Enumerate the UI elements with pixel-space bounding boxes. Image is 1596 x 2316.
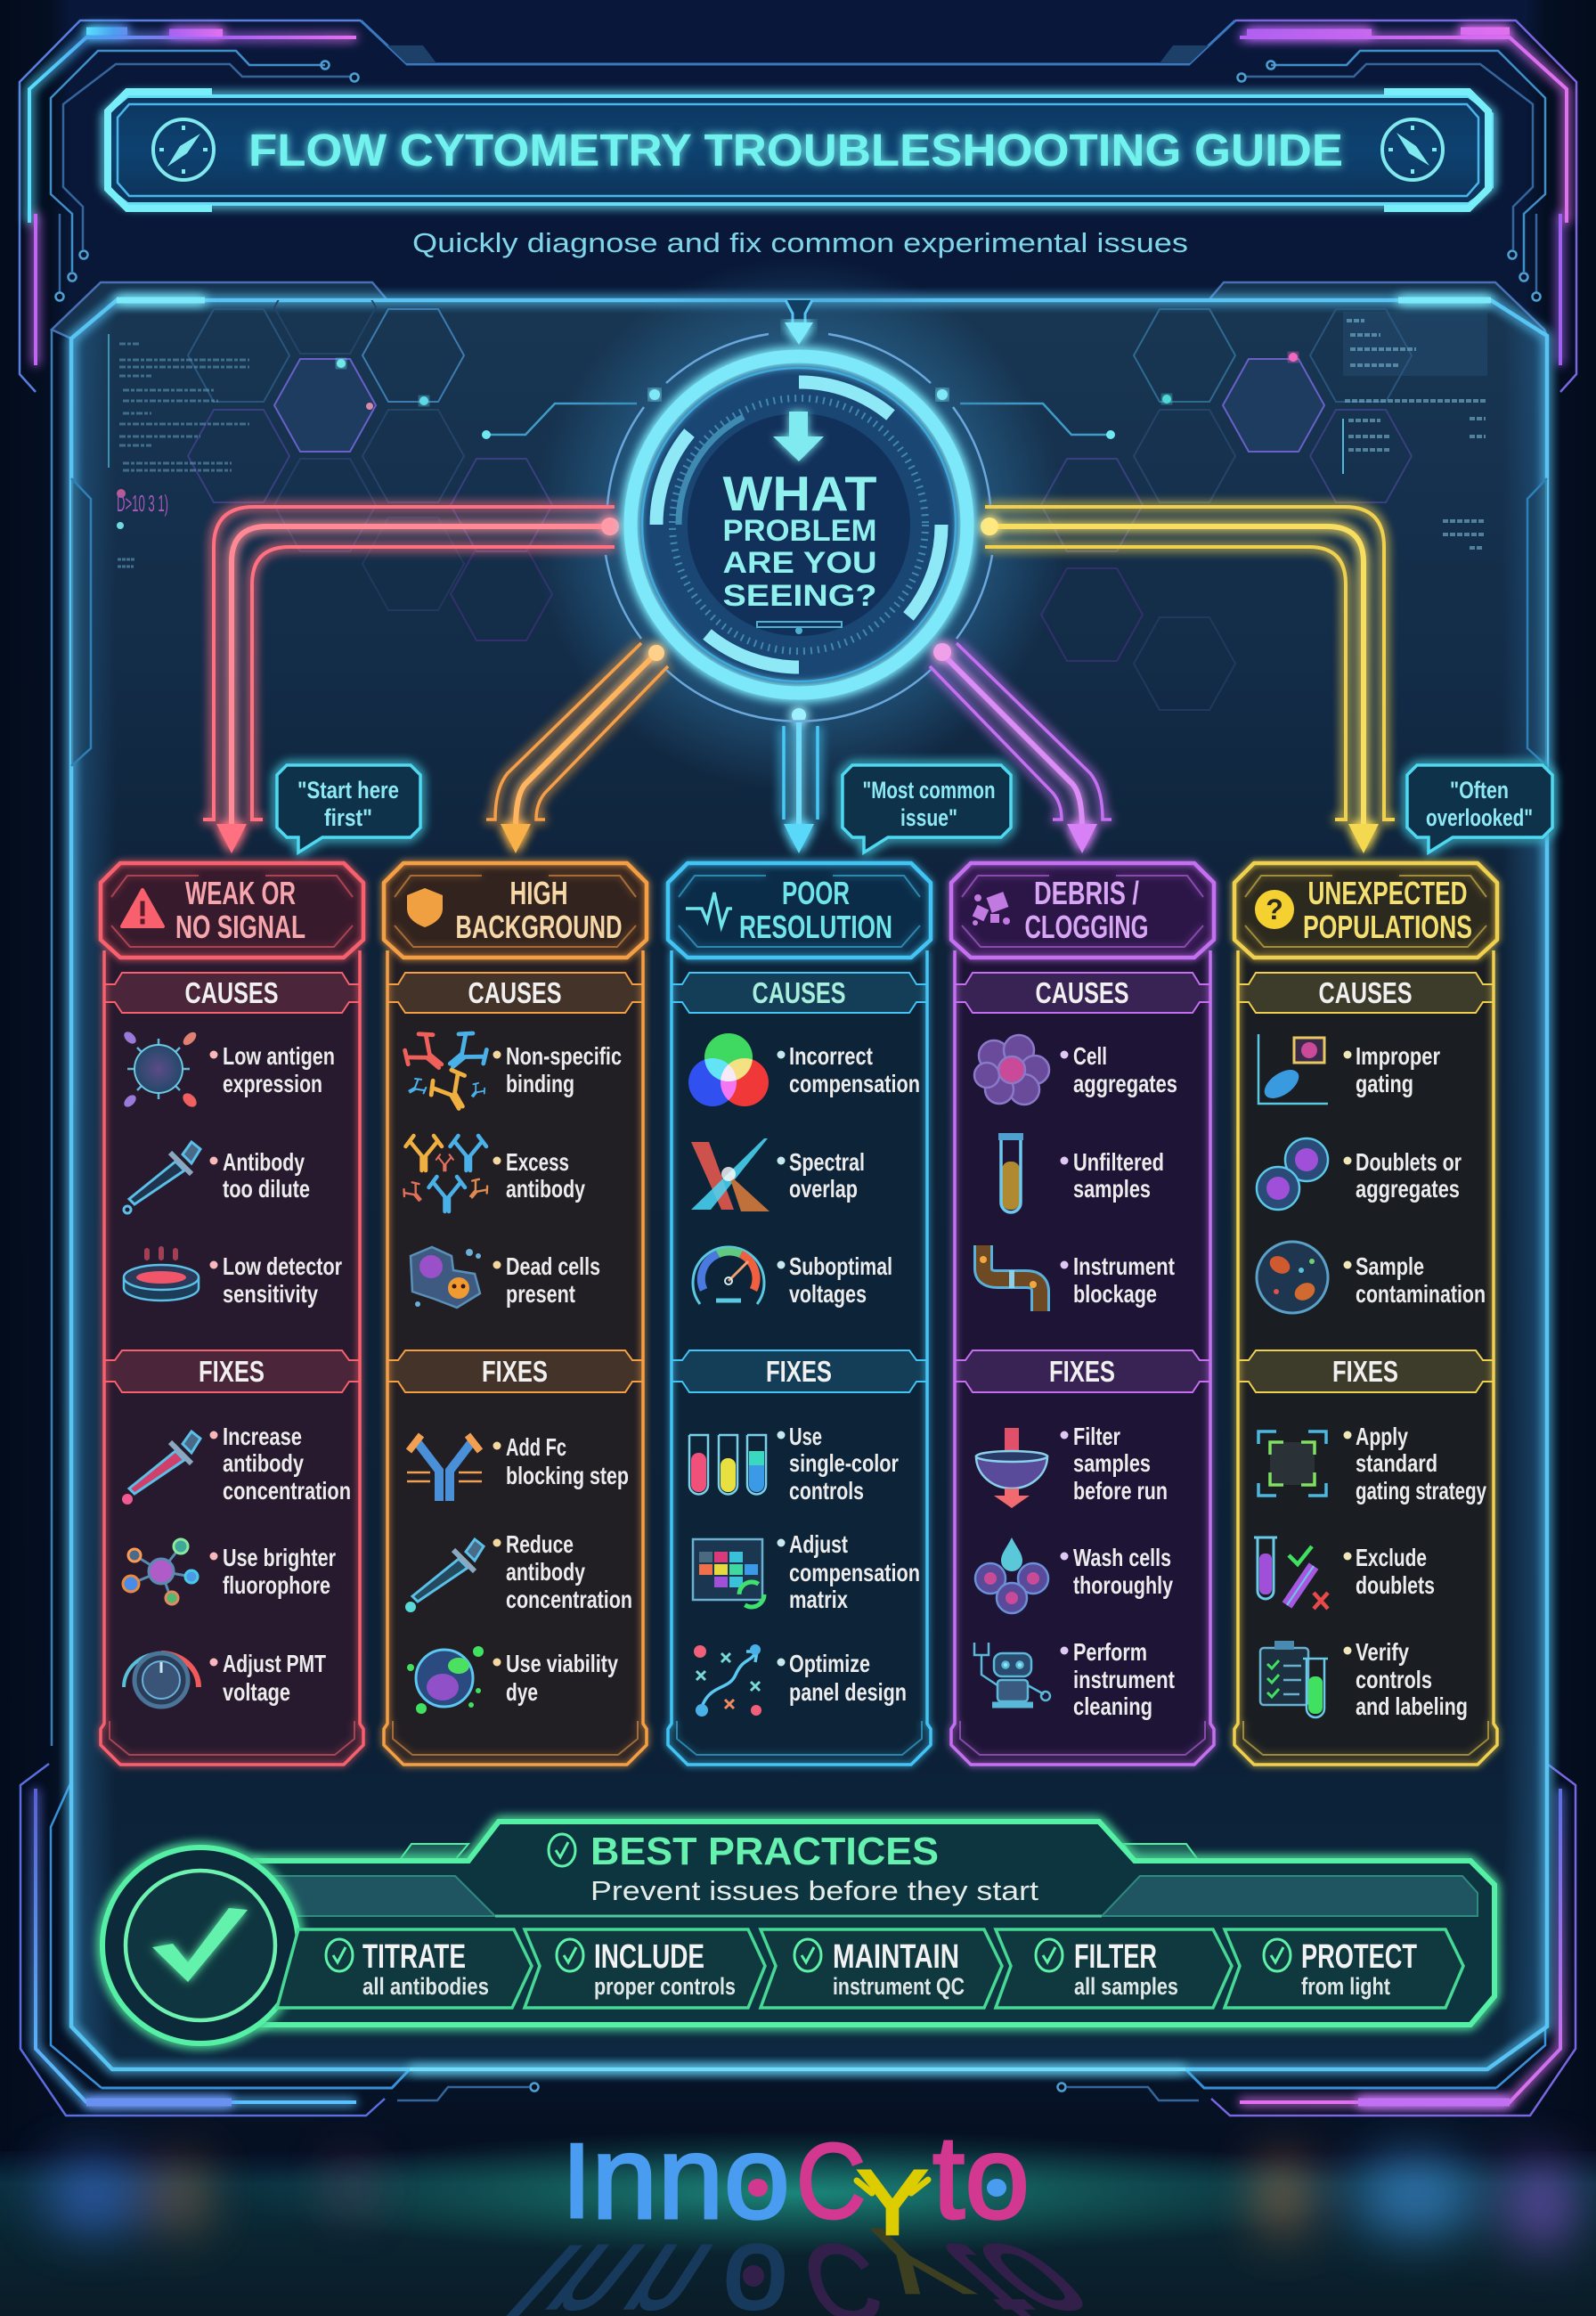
logo: InnoCyto: Y: [857, 2151, 928, 2254]
chevron: titrate: [277, 1929, 532, 2008]
fix: wash cells thoroughly: Wash cells: [1073, 1544, 1171, 1571]
fix: perform instrument cleaning: instrument: [1073, 1666, 1175, 1693]
cause: antibody too dilute: too dilute: [223, 1175, 310, 1203]
cause: antibody too dilute: [124, 1142, 310, 1213]
heading: debris clogging: DEBRIS /: [1034, 875, 1139, 911]
callout: often overlooked: overlooked": [1426, 804, 1533, 831]
label: fixes: FIXES: [199, 1355, 265, 1388]
main panel: [52, 282, 1547, 2073]
icon: voltage dial: [124, 1653, 199, 1707]
chevron: protect: from light: [1301, 1973, 1390, 2000]
arrow: weak or no signal: [203, 507, 619, 853]
arrow: high background: [486, 643, 668, 853]
fix: wash cells thoroughly: [975, 1537, 1173, 1613]
cause: unfiltered samples: samples: [1073, 1175, 1151, 1203]
cause: low detector sensitivity: [124, 1249, 342, 1308]
callout: most common issue: "Most common: [862, 777, 996, 803]
frame bottom connector: [102, 2069, 1496, 2088]
callout: start here first: first": [324, 804, 372, 831]
panel: weak or no signal: [101, 863, 363, 1765]
heading: unexpected populations: POPULATIONS: [1303, 909, 1472, 945]
cause: antibody too dilute: Antibody: [223, 1148, 305, 1176]
heading: high background: BACKGROUND: [456, 909, 622, 945]
label: causes: CAUSES: [752, 976, 846, 1009]
bracket top left: [20, 20, 361, 392]
title text: FLOW CYTOMETRY TROUBLESHOOTING GUIDE: [248, 125, 1343, 175]
callout: often overlooked: "Often: [1450, 777, 1509, 803]
fix: exclude doublets: [1254, 1537, 1435, 1609]
chevron: titrate: all antibodies: [362, 1973, 489, 2000]
chevron: maintain: MAINTAIN: [833, 1938, 959, 1976]
panel: debris clogging: [951, 863, 1214, 1765]
cause: improper gating: Improper: [1356, 1042, 1440, 1070]
cause: non-specific binding: [399, 1027, 622, 1117]
icon: compass left: [153, 119, 214, 180]
icon: cell with antigens: [122, 1030, 200, 1110]
heading: poor resolution: POOR: [782, 875, 850, 911]
frame top connector: [361, 20, 1235, 64]
icon: petri dish: [124, 1249, 199, 1301]
heading: poor resolution: [686, 875, 892, 945]
cause: incorrect compensation: Incorrect: [789, 1042, 873, 1070]
chevron: filter: FILTER: [1074, 1938, 1157, 1976]
fix: optimize panel design: Optimize: [789, 1650, 870, 1677]
icon: three tubes: [689, 1435, 766, 1495]
cause: cell aggregates: aggregates: [1073, 1070, 1177, 1097]
sub band left: [272, 1876, 495, 1916]
heading: debris clogging: CLOGGING: [1024, 909, 1149, 945]
central hub: [606, 334, 992, 722]
fix: reduce antibody concentration: Reduce: [506, 1530, 574, 1558]
icon: dropper: [124, 1142, 200, 1213]
icon: strategy plot: [694, 1644, 761, 1717]
icon: question badge: ?: [1266, 893, 1283, 926]
label: causes: CAUSES: [1318, 976, 1413, 1009]
fix: apply standard gating strategy: [1258, 1423, 1486, 1505]
callout: most common issue: issue": [900, 804, 957, 831]
label: fixes: FIXES: [1049, 1355, 1115, 1388]
fix: increase antibody concentration: concentration: [223, 1477, 351, 1505]
heading: poor resolution: RESOLUTION: [739, 909, 892, 945]
panel: high background: [384, 863, 647, 1765]
fix: wash cells thoroughly: thoroughly: [1073, 1571, 1173, 1599]
fix: use single-color controls: single-color: [789, 1449, 899, 1477]
icon: warning: [122, 890, 163, 926]
chevron: protect: [1225, 1929, 1463, 2008]
cause: instrument blockage: [980, 1245, 1175, 1311]
fix: use single-color controls: controls: [789, 1477, 864, 1505]
fix: increase antibody concentration: Increase: [223, 1423, 302, 1450]
fix: add fc blocking step: blocking step: [506, 1462, 629, 1489]
logo: InnoCyto: to: [932, 2112, 1030, 2244]
hub glow: [532, 257, 1066, 792]
heading: weak or no signal: WEAK OR: [185, 875, 296, 911]
cause: low detector sensitivity: sensitivity: [223, 1280, 318, 1308]
heading: weak or no signal: NO SIGNAL: [175, 909, 305, 945]
floor reflection: [0, 2131, 1596, 2316]
icon: big check badge: [102, 1847, 298, 2043]
callout: most common issue: [843, 765, 1011, 852]
label: fixes: FIXES: [766, 1355, 832, 1388]
fix: perform instrument cleaning: cleaning: [1073, 1692, 1152, 1720]
icon: many antibodies: [401, 1136, 491, 1211]
label: causes: CAUSES: [468, 976, 561, 1009]
icon: debris particles: [973, 892, 1010, 926]
cause: doublets or aggregates: aggregates: [1356, 1175, 1460, 1203]
cause: instrument blockage: Instrument: [1073, 1252, 1175, 1280]
icon: gauge: [693, 1247, 764, 1304]
fix: adjust compensation matrix: [693, 1530, 920, 1613]
logo reflection: [474, 2210, 1149, 2316]
cause: dead cells present: Dead cells: [506, 1252, 600, 1280]
icon: dropper with teal drop: [405, 1539, 484, 1612]
hud data left: [109, 334, 249, 567]
chevron: filter: [996, 1929, 1232, 2008]
callout: start here first: "Start here: [297, 777, 399, 803]
chevron: maintain: instrument QC: [833, 1973, 965, 2000]
arrow: unexpected populations: [981, 507, 1395, 853]
icon: rgb overlap: [688, 1033, 769, 1106]
bracket bottom right: [1058, 1764, 1576, 2116]
logo reflection: Y: [822, 2210, 996, 2312]
label: fixes: FIXES: [1332, 1355, 1398, 1388]
label: fixes: FIXES: [482, 1355, 548, 1388]
hud data right: [1343, 312, 1487, 548]
label: causes: CAUSES: [1035, 976, 1129, 1009]
icon: gated plot: [1258, 1034, 1328, 1104]
fix: optimize panel design: [694, 1644, 907, 1717]
fix: adjust compensation matrix: compensation: [789, 1559, 920, 1586]
cause: suboptimal voltages: [693, 1247, 892, 1308]
chevron: include: [525, 1929, 765, 2008]
cause: improper gating: [1258, 1034, 1440, 1104]
heading: high background: [407, 875, 622, 945]
side rails: [52, 330, 1544, 1746]
fix: use single-color controls: Use: [789, 1423, 822, 1450]
arrow: poor resolution: [784, 708, 818, 853]
cause: low detector sensitivity: Low detector: [223, 1252, 342, 1280]
title banner: [106, 92, 1492, 208]
hub segmented bars: [656, 382, 941, 667]
icon: matrix with refresh: [693, 1539, 764, 1607]
cause: low antigen expression: [122, 1030, 335, 1110]
chevron: titrate: TITRATE: [362, 1938, 466, 1976]
fix: adjust pmt voltage: Adjust PMT: [223, 1650, 326, 1677]
cause: instrument blockage: blockage: [1073, 1280, 1157, 1308]
chevron: include: INCLUDE: [594, 1938, 704, 1976]
panel: unexpected populations: [1234, 863, 1497, 1765]
callout: start here first: [277, 765, 420, 852]
hub question text: ARE YOU: [723, 546, 876, 580]
cause: spectral overlap: [691, 1138, 865, 1211]
cause: spectral overlap: overlap: [789, 1175, 858, 1203]
cause: suboptimal voltages: Suboptimal: [789, 1252, 892, 1280]
cause: non-specific binding: Non-specific: [506, 1042, 622, 1070]
fix: add fc blocking step: [407, 1433, 629, 1501]
icon: cell cluster: [974, 1035, 1049, 1105]
fix: apply standard gating strategy: Apply: [1356, 1423, 1408, 1450]
label: causes: CAUSES: [185, 976, 278, 1009]
connector: top arrow: [785, 300, 813, 345]
circuit traces: [482, 404, 1115, 439]
hub question text: [723, 466, 876, 613]
hub question text: SEEING?: [723, 579, 876, 613]
icon: tubes with check and cross: [1254, 1537, 1328, 1609]
icon: fluorophore molecule: [123, 1539, 198, 1604]
fix: adjust pmt voltage: [124, 1650, 326, 1707]
chevron: maintain: [761, 1929, 1002, 2008]
panel: best practices: [102, 1822, 1494, 2043]
fix: exclude doublets: Exclude: [1356, 1544, 1427, 1571]
hub question text: WHAT: [723, 466, 876, 521]
cause: suboptimal voltages: voltages: [789, 1280, 867, 1308]
panel: poor resolution: [668, 863, 931, 1765]
fix: use brighter fluorophore: [123, 1539, 336, 1604]
fix: filter samples before run: [976, 1423, 1168, 1508]
chevron: filter: all samples: [1074, 1973, 1178, 2000]
subtitle: Quickly diagnose and fix common experimental issues: [412, 227, 1188, 258]
fix: optimize panel design: panel design: [789, 1678, 907, 1706]
cause: unfiltered samples: [998, 1133, 1164, 1212]
fix: apply standard gating strategy: gating strategy: [1356, 1477, 1486, 1505]
bracket top right: [1235, 20, 1576, 392]
hexagon pattern: [188, 261, 1412, 710]
cause: incorrect compensation: [688, 1033, 920, 1106]
icon: blocked antibody: [407, 1435, 482, 1501]
cause: unfiltered samples: Unfiltered: [1073, 1148, 1164, 1176]
fix: use viability dye: [407, 1646, 618, 1714]
cause: incorrect compensation: compensation: [789, 1070, 920, 1097]
hub question text: PROBLEM: [723, 514, 876, 548]
icon: doublet cells: [1257, 1138, 1328, 1210]
logo: InnoCyto: I: [562, 2122, 591, 2240]
arrow: debris clogging: [930, 643, 1112, 853]
icon: blocked pipe: [980, 1245, 1040, 1311]
best practices title: BEST PRACTICES: [590, 1830, 939, 1873]
logo: InnoCyto: [562, 2112, 1030, 2254]
cause: doublets or aggregates: Doublets or: [1356, 1148, 1462, 1176]
heading: debris clogging: [973, 875, 1149, 945]
fix: reduce antibody concentration: antibody: [506, 1558, 585, 1586]
fix: perform instrument cleaning: Perform: [1073, 1638, 1147, 1666]
icon: question badge: [1255, 890, 1294, 929]
fix: use viability dye: Use viability: [506, 1650, 618, 1677]
cause: sample contamination: [1257, 1242, 1486, 1313]
icon: cleaning robot: [974, 1643, 1050, 1705]
heading: unexpected populations: [1255, 875, 1472, 945]
cause: dead cells present: present: [506, 1280, 575, 1308]
heading: weak or no signal: [122, 875, 305, 945]
heading: unexpected populations: UNEXPECTED: [1307, 875, 1468, 911]
fix: perform instrument cleaning: [974, 1638, 1175, 1720]
cause: dead cells present: [411, 1247, 600, 1308]
cause: excess antibody: antibody: [506, 1175, 585, 1203]
fix: filter samples before run: samples: [1073, 1449, 1151, 1477]
icon: hub arrow: [773, 412, 824, 461]
bracket bottom left: [20, 1764, 538, 2116]
cause: sample contamination: Sample: [1356, 1252, 1424, 1280]
icon: spectral cross: [691, 1138, 770, 1211]
icon: dropper with pink fluid: [122, 1431, 200, 1505]
fix: exclude doublets: doublets: [1356, 1571, 1435, 1599]
cause: doublets or aggregates: [1257, 1138, 1462, 1210]
fix: filter samples before run: before run: [1073, 1477, 1168, 1505]
cause: excess antibody: [401, 1136, 585, 1211]
icon: gating brackets: [1258, 1431, 1326, 1496]
icon: dead cell with skull: [411, 1247, 481, 1308]
icon: contaminated dish: [1257, 1242, 1328, 1313]
icon: stained cell: [407, 1646, 484, 1714]
fix: use brighter fluorophore: Use brighter: [223, 1544, 336, 1571]
logo: InnoCyto: nno: [591, 2112, 790, 2244]
fix: reduce antibody concentration: concentration: [506, 1586, 632, 1613]
cause: spectral overlap: Spectral: [789, 1148, 865, 1176]
icon: compass right: [1382, 119, 1443, 180]
chevron: include: proper controls: [594, 1973, 736, 2000]
logo: InnoCyto: C: [796, 2122, 866, 2241]
fix: add fc blocking step: Add Fc: [506, 1433, 566, 1461]
fix: reduce antibody concentration: [405, 1530, 632, 1613]
heading: high background: HIGH: [509, 875, 568, 911]
chevron: protect: PROTECT: [1301, 1938, 1417, 1976]
sub band right: [1102, 1876, 1478, 1916]
fix: verify controls and labeling: controls: [1356, 1666, 1432, 1693]
fix: apply standard gating strategy: standard: [1356, 1449, 1437, 1477]
hud data left: D>10 3 1): [117, 490, 168, 517]
fix: verify controls and labeling: Verify: [1356, 1638, 1409, 1666]
fix: verify controls and labeling: [1260, 1638, 1468, 1720]
fix: use viability dye: dye: [506, 1678, 538, 1706]
cause: sample contamination: contamination: [1356, 1280, 1486, 1308]
fix: increase antibody concentration: antibody: [223, 1449, 304, 1477]
fix: filter samples before run: Filter: [1073, 1423, 1120, 1450]
icon: wash drop and cells: [975, 1537, 1048, 1613]
cause: excess antibody: Excess: [506, 1148, 569, 1176]
cause: cell aggregates: Cell: [1073, 1042, 1107, 1070]
icon: sieve: [976, 1428, 1047, 1508]
icon: clipboard and tube: [1260, 1641, 1328, 1717]
icon: sample tube: [998, 1133, 1023, 1212]
cause: non-specific binding: binding: [506, 1070, 574, 1097]
icon: scattered antibodies: [399, 1027, 493, 1117]
best practices subtitle: Prevent issues before they start: [590, 1875, 1038, 1906]
fix: adjust compensation matrix: matrix: [789, 1586, 848, 1613]
fix: adjust pmt voltage: voltage: [223, 1678, 290, 1706]
cause: low antigen expression: expression: [223, 1070, 322, 1097]
fix: adjust compensation matrix: Adjust: [789, 1530, 848, 1558]
fix: use single-color controls: [689, 1423, 899, 1505]
fix: increase antibody concentration: [122, 1423, 351, 1505]
cause: low antigen expression: Low antigen: [223, 1042, 335, 1070]
cause: cell aggregates: [974, 1035, 1177, 1105]
cause: improper gating: gating: [1356, 1070, 1413, 1097]
fix: use brighter fluorophore: fluorophore: [223, 1571, 330, 1599]
icon: pulse: [686, 893, 732, 926]
icon: shield: [407, 888, 443, 927]
fix: verify controls and labeling: and labeling: [1356, 1692, 1468, 1720]
callout: often overlooked: [1407, 765, 1552, 852]
